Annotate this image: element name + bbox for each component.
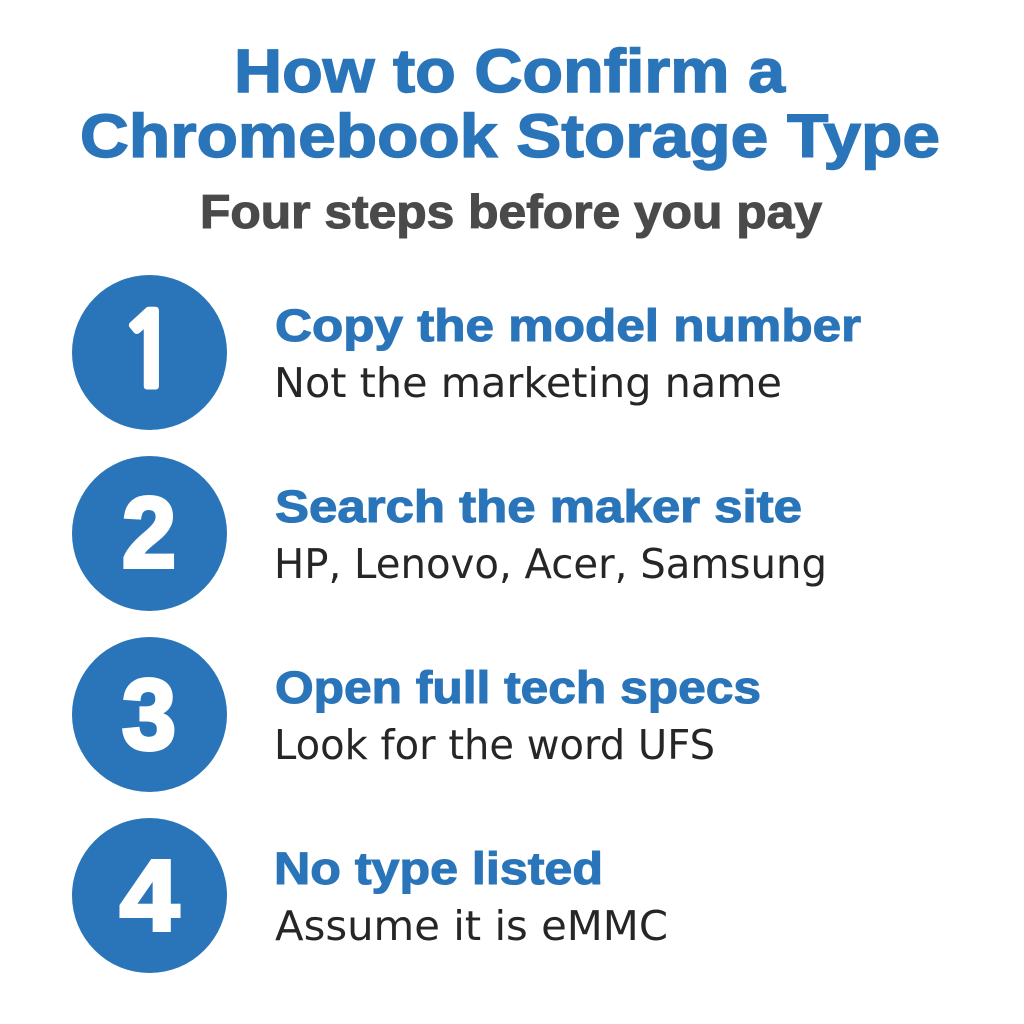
step 4 circle bbox=[72, 818, 227, 973]
step 2 bbox=[72, 456, 827, 611]
subtitle: Four steps before you pay bbox=[200, 185, 822, 238]
step 3 bbox=[72, 637, 761, 792]
step 1 number: 1 bbox=[117, 301, 181, 403]
step 3 number: 3 bbox=[122, 659, 176, 771]
step 4 heading: No type listed bbox=[274, 843, 603, 894]
title: How to Confirm a bbox=[234, 37, 786, 105]
step 3 heading: Open full tech specs bbox=[275, 662, 761, 713]
step 2 description: HP, Lenovo, Acer, Samsung bbox=[274, 540, 827, 588]
title bbox=[80, 37, 940, 170]
step 4 description: Assume it is eMMC bbox=[275, 902, 668, 950]
title: Chromebook Storage Type bbox=[80, 102, 940, 170]
step 2 number: 2 bbox=[122, 477, 176, 589]
step 1 heading: Copy the model number bbox=[275, 300, 861, 351]
step 2 circle bbox=[72, 456, 227, 611]
step 3 description: Look for the word UFS bbox=[274, 721, 715, 769]
step 1 bbox=[72, 275, 861, 430]
step 2 heading: Search the maker site bbox=[275, 481, 802, 532]
step 4 bbox=[72, 818, 668, 973]
step 1 description: Not the marketing name bbox=[274, 359, 782, 407]
step 1 circle bbox=[72, 275, 227, 430]
step 4 number: 4 bbox=[120, 840, 179, 952]
step 3 circle bbox=[72, 637, 227, 792]
